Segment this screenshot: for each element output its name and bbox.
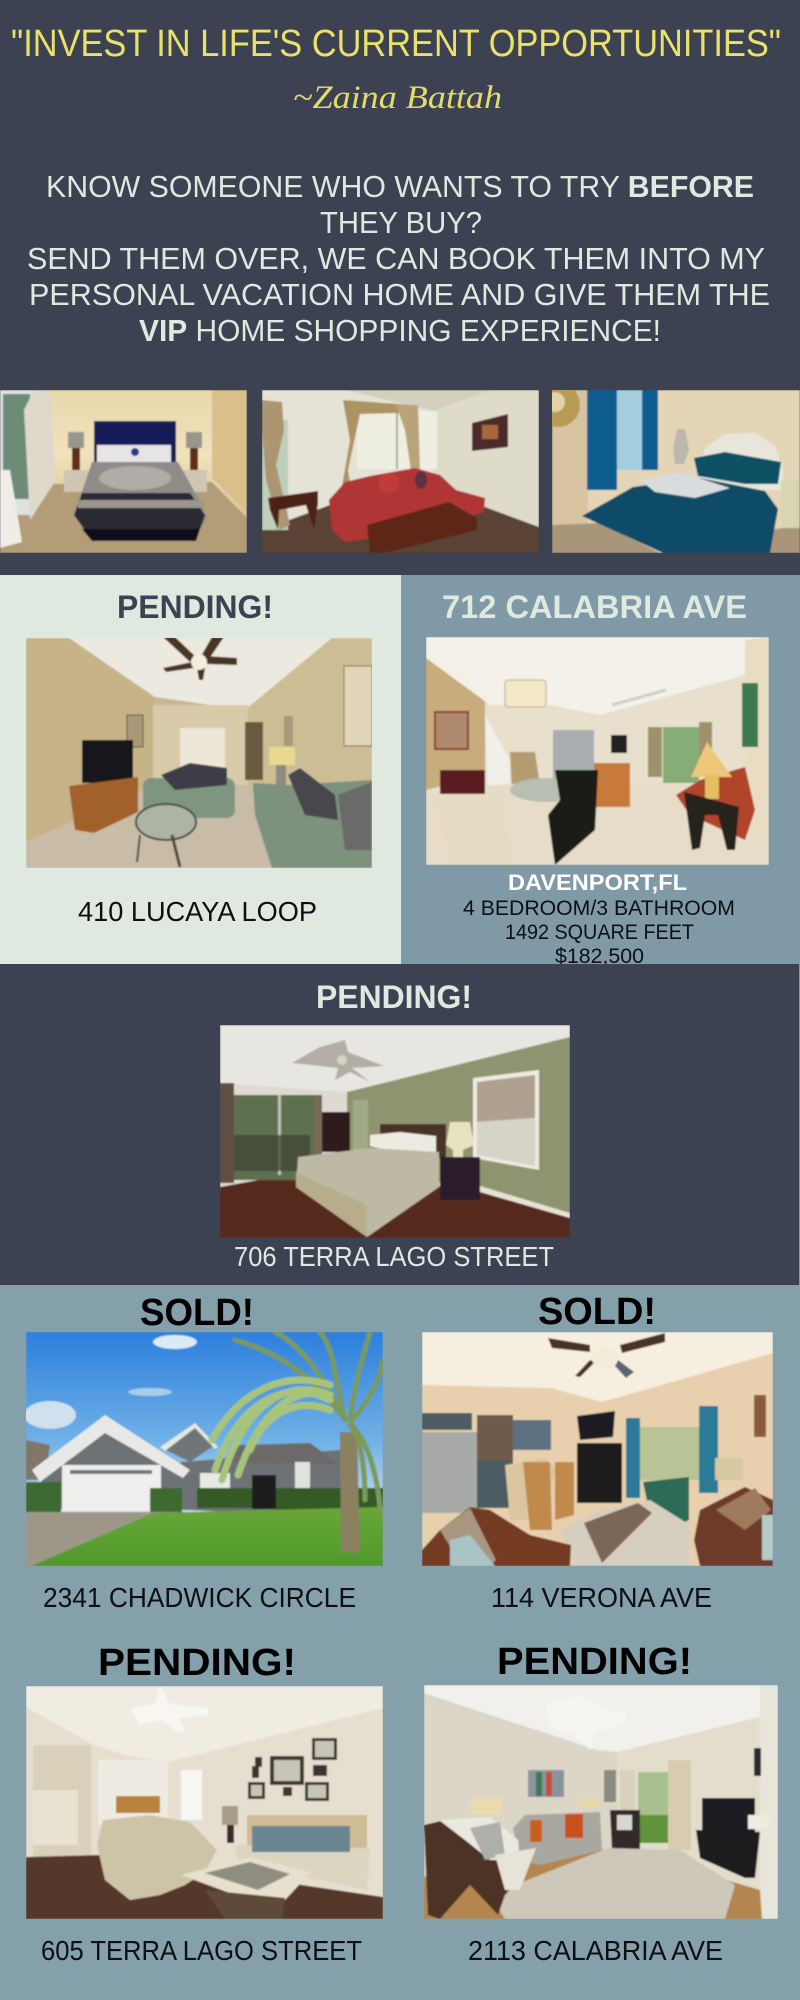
heading: sold left: SOLD! — [140, 1292, 254, 1334]
panel: quote and intro — [0, 0, 800, 575]
listing details: DAVENPORT,FL — [508, 870, 687, 895]
address label: 2113 CALABRIA AVE — [468, 1935, 723, 1966]
listing details: 1492 SQUARE FEET — [505, 921, 694, 944]
address label: 605 TERRA LAGO STREET — [41, 1935, 362, 1966]
photo: living room with red sofa — [262, 390, 539, 553]
panel: sold and pending listings — [0, 1285, 800, 2000]
heading: sold right: SOLD! — [538, 1291, 656, 1333]
address label: 410 LUCAYA LOOP — [78, 896, 317, 927]
panel: 410 Lucaya Loop — [0, 575, 401, 964]
intro text — [27, 169, 770, 348]
photo: beige recliners and gallery wall — [26, 1686, 383, 1919]
listing details: $182,500 — [555, 945, 644, 968]
listing details — [463, 870, 735, 968]
heading: pending: PENDING! — [117, 589, 273, 625]
photo: bedroom with teal bedding — [552, 390, 800, 553]
intro text: VIP HOME SHOPPING EXPERIENCE! — [139, 313, 661, 348]
photo: living room and kitchen with fan — [422, 1332, 773, 1566]
heading: address: 712 CALABRIA AVE — [442, 589, 747, 625]
photo: bedroom with green wall — [220, 1025, 570, 1238]
intro text: THEY BUY? — [320, 205, 482, 240]
signature: ~Zaina Battah — [293, 80, 502, 116]
address label: 114 VERONA AVE — [491, 1582, 712, 1613]
photo: living room with shag rug — [424, 1685, 778, 1919]
listing details: 4 BEDROOM/3 BATHROOM — [463, 897, 735, 920]
address label: 706 TERRA LAGO STREET — [234, 1241, 554, 1272]
panel: 706 Terra Lago Street — [0, 964, 800, 1285]
intro text: KNOW SOMEONE WHO WANTS TO TRY BEFORE — [46, 169, 754, 204]
address label: 2341 CHADWICK CIRCLE — [43, 1582, 356, 1613]
photo: long living room — [26, 638, 372, 868]
heading: pending: PENDING! — [316, 979, 472, 1015]
heading: pending left: PENDING! — [98, 1642, 296, 1684]
intro text: PERSONAL VACATION HOME AND GIVE THEM THE — [29, 277, 770, 312]
heading: pending right: PENDING! — [497, 1641, 692, 1683]
photo: open plan dining and living — [426, 637, 769, 865]
photo: bedroom with navy headboard — [0, 390, 247, 553]
intro text: SEND THEM OVER, WE CAN BOOK THEM INTO MY — [27, 241, 765, 276]
panel: 712 Calabria Ave — [401, 575, 800, 968]
photo: gray house and palm — [26, 1332, 383, 1566]
